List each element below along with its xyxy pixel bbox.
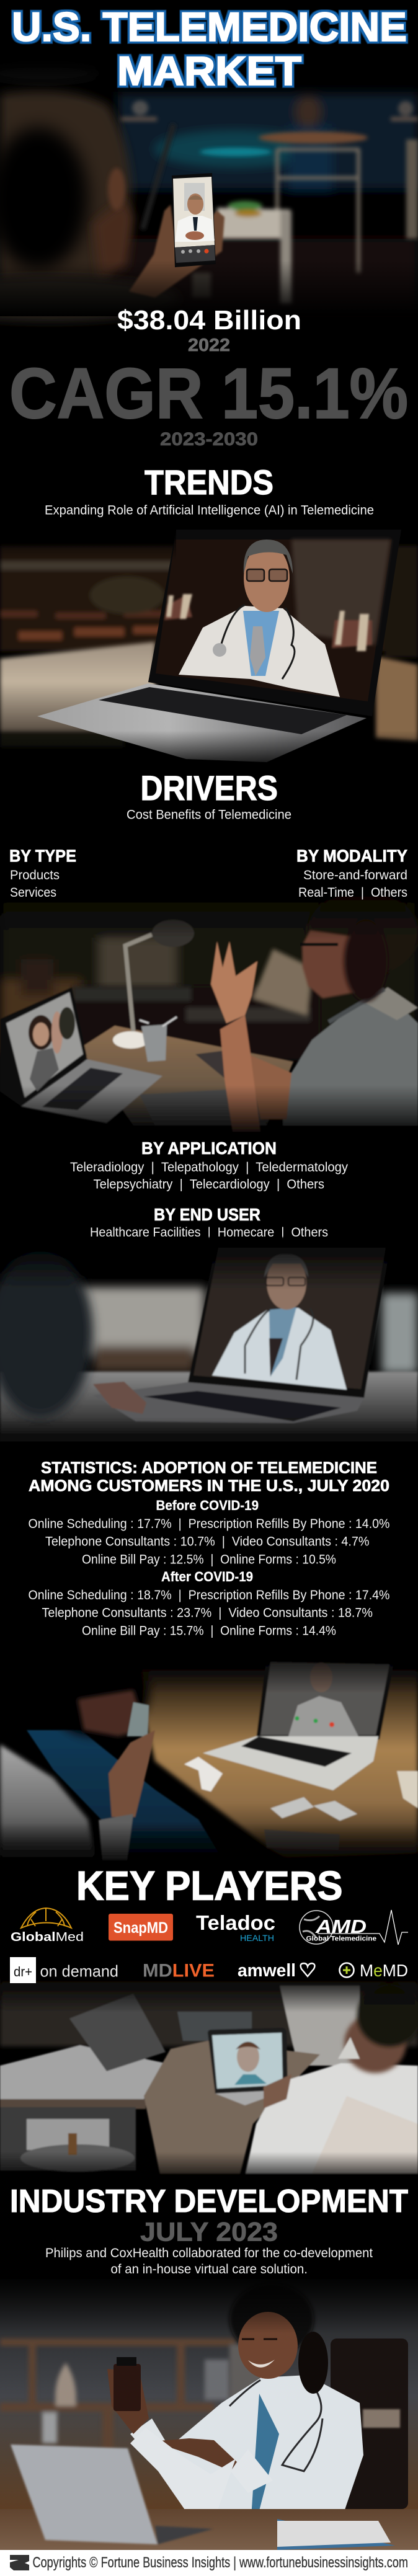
laptop base and keyboard xyxy=(93,1382,364,1423)
photo: patient on phone video call xyxy=(0,59,418,321)
logo: AMD Global Telemedicine xyxy=(300,1910,408,1945)
base year: 2022 xyxy=(188,335,230,355)
logo: Teladoc Health xyxy=(196,1911,275,1943)
coat xyxy=(160,2375,363,2512)
by type segment: BY TYPE xyxy=(9,846,76,866)
smile xyxy=(248,2360,275,2368)
by application segment: Telepsychiatry | Telecardiology | Others xyxy=(93,1177,324,1192)
statistics heading xyxy=(29,1459,389,1495)
by end user segment xyxy=(90,1205,328,1240)
development text: Philips and CoxHealth collaborated for the co-development xyxy=(45,2246,373,2260)
desk xyxy=(80,1026,293,1126)
logo: SnapMD xyxy=(109,1914,173,1941)
before covid statistics: Online Scheduling : 17.7% | Prescription Refills By Phone : 14.0% xyxy=(29,1517,389,1531)
logo: Teladoc Health: HEALTH xyxy=(240,1933,274,1943)
development text xyxy=(45,2246,373,2276)
laptop lid xyxy=(148,530,401,716)
room xyxy=(0,899,418,1054)
wooden table xyxy=(133,1668,418,1860)
logo: dr on demand: dr+ xyxy=(14,1964,32,1979)
by modality segment: Store-and-forward xyxy=(303,868,407,882)
logo: Teladoc Health: Teladoc xyxy=(196,1911,275,1934)
fades xyxy=(0,59,418,102)
laptop screen xyxy=(156,540,392,701)
logo: SnapMD: SnapMD xyxy=(113,1919,168,1937)
desk xyxy=(0,2509,418,2550)
woman doctor xyxy=(248,890,418,1126)
logo: MeMD xyxy=(340,1961,408,1980)
fades xyxy=(0,526,176,560)
after covid statistics xyxy=(29,1569,389,1638)
by end user segment: BY END USER xyxy=(154,1205,260,1224)
sofa xyxy=(72,949,320,1060)
logo: amwell: amwell xyxy=(238,1961,296,1981)
before covid statistics xyxy=(29,1498,389,1566)
by type segment: Products xyxy=(10,868,60,882)
before covid statistics: Online Bill Pay : 12.5% | Online Forms : 10.5% xyxy=(82,1553,336,1566)
fades xyxy=(0,1975,418,2012)
eyes xyxy=(242,2338,277,2340)
photo: man in bed on video consult xyxy=(0,1975,418,2186)
table xyxy=(0,1372,418,1446)
logo: GlobalMed: Global Med xyxy=(11,1930,84,1944)
glass side table xyxy=(0,2107,136,2172)
industry development heading: INDUSTRY DEVELOPMENT xyxy=(10,2183,408,2219)
by modality segment: Real-Time | Others xyxy=(298,886,407,900)
by end user segment: Healthcare Facilities | Homecare | Others xyxy=(90,1225,328,1240)
office backdrop xyxy=(59,1287,418,1374)
hand with sleeve xyxy=(99,1730,155,1860)
teal glow xyxy=(200,148,272,156)
development date: JULY 2023 xyxy=(140,2218,278,2247)
laptop xyxy=(11,2445,213,2544)
before covid statistics: Telephone Consultants : 10.7% | Video Consultants : 4.7% xyxy=(45,1534,370,1549)
wooden table xyxy=(0,642,418,747)
man xyxy=(246,1984,418,2174)
by application segment xyxy=(70,1139,348,1192)
fades xyxy=(0,1646,418,1693)
logo: GlobalMed xyxy=(11,1908,84,1944)
after covid statistics: Telephone Consultants : 23.7% | Video Consultants : 18.7% xyxy=(42,1606,373,1620)
laptop base xyxy=(37,683,367,762)
photo: sick girl with nebulizer on video consult xyxy=(0,1646,418,1867)
white blanket xyxy=(0,1744,96,1860)
fades xyxy=(0,1237,418,1290)
by modality segment xyxy=(296,846,407,900)
logo: dr on demand: on demand xyxy=(40,1962,118,1981)
blanket xyxy=(144,2041,320,2174)
fades xyxy=(0,884,418,939)
drivers heading: DRIVERS xyxy=(140,768,278,807)
brick wall xyxy=(0,546,418,657)
typing hand xyxy=(93,1382,146,1414)
room backdrop xyxy=(0,92,418,313)
logo: dr on demand xyxy=(10,1957,118,1983)
laptop screen and doctor xyxy=(193,1248,386,1390)
development text: of an in-house virtual care solution. xyxy=(110,2262,308,2276)
footer logo xyxy=(10,2555,29,2570)
bed lower edge xyxy=(0,2099,146,2109)
title: U.S. TELEMEDICINE xyxy=(12,4,407,50)
phone xyxy=(172,173,216,267)
by application segment: Teleradiology | Telepathology | Teledermatology xyxy=(70,1160,348,1175)
supporting hand and forearm xyxy=(220,1015,260,1132)
ponytail xyxy=(298,2332,328,2394)
face xyxy=(238,2312,298,2379)
laptop lid xyxy=(188,1245,391,1398)
by type segment xyxy=(9,846,76,900)
logo: MDLIVE: MDLIVE xyxy=(143,1961,215,1981)
woman seen from behind xyxy=(0,64,180,321)
by type segment: Services xyxy=(10,886,56,900)
bed xyxy=(0,2045,166,2099)
title xyxy=(12,4,407,94)
after covid statistics: After COVID-19 xyxy=(161,1569,253,1584)
hand and bottle xyxy=(107,2357,149,2434)
cup xyxy=(397,1771,418,1808)
scrub top xyxy=(251,2394,279,2518)
forecast period: 2023-2030 xyxy=(160,429,258,450)
raised arm and sleeve xyxy=(130,2418,171,2459)
blister packs and thermometer xyxy=(270,1797,357,1821)
key players heading: KEY PLAYERS xyxy=(76,1863,342,1909)
logo: MeMD: MeMD xyxy=(360,1961,408,1980)
laptop on bed xyxy=(208,2028,288,2105)
phone on table xyxy=(264,1829,340,1850)
drivers text: Cost Benefits of Telemedicine xyxy=(127,807,291,822)
office background xyxy=(0,2279,418,2512)
photo: doctor presenting medication on laptop call xyxy=(0,2275,418,2550)
by modality segment: BY MODALITY xyxy=(296,846,407,866)
notebook xyxy=(195,1048,245,1082)
statistics heading: AMONG CUSTOMERS IN THE U.S., JULY 2020 xyxy=(29,1476,389,1495)
by application segment: BY APPLICATION xyxy=(141,1139,277,1158)
logo: AMD Global Telemedicine: Global Telemedicine xyxy=(306,1935,376,1942)
laptop with patient xyxy=(0,987,162,1123)
shelves xyxy=(0,2338,236,2471)
photo: doctor examining wrist over video call xyxy=(0,884,418,1138)
raised hand xyxy=(211,941,257,1023)
pen holder xyxy=(140,1017,177,1062)
desk lamp xyxy=(113,920,194,1049)
laptop keyboard xyxy=(99,687,347,734)
chair xyxy=(229,2338,408,2509)
market size value: $38.04 Billion xyxy=(117,305,301,335)
papers on desk xyxy=(277,2519,395,2550)
trends text: Expanding Role of Artificial Intelligence (AI) in Telemedicine xyxy=(45,504,374,517)
coat sleeve xyxy=(130,2428,236,2512)
laptop xyxy=(203,1656,394,1790)
fade xyxy=(0,2275,418,2334)
paper sheet xyxy=(140,1088,267,1126)
logo: AMD Global Telemedicine: AMD xyxy=(315,1916,367,1937)
person silhouette xyxy=(0,1250,93,1417)
before covid statistics: Before COVID-19 xyxy=(156,1498,259,1513)
ear xyxy=(108,168,125,210)
footer band xyxy=(0,2550,418,2576)
photo: doctor on laptop with user typing xyxy=(0,1237,418,1460)
open hand xyxy=(152,2438,237,2471)
statistics heading: STATISTICS: ADOPTION OF TELEMEDICINE xyxy=(41,1459,377,1477)
blue sweater xyxy=(27,1730,223,1860)
walking frame and table xyxy=(121,100,418,304)
bedroom wall xyxy=(0,1978,418,2046)
tissue xyxy=(184,1757,223,1792)
hair xyxy=(229,2283,314,2355)
after covid statistics: Online Scheduling : 18.7% | Prescription Refills By Phone : 17.4% xyxy=(29,1588,389,1602)
girl head xyxy=(43,1650,149,1736)
hand xyxy=(129,205,225,298)
trends heading: TRENDS xyxy=(145,463,273,502)
pillows xyxy=(69,1986,360,2071)
stethoscope xyxy=(229,2380,322,2471)
after covid statistics: Online Bill Pay : 15.7% | Online Forms : 14.4% xyxy=(82,1624,336,1638)
title: MARKET xyxy=(117,48,301,94)
white sofa arm xyxy=(312,2096,418,2174)
doctor xyxy=(179,540,340,697)
photo: doctor on laptop with brick wall xyxy=(0,526,418,771)
